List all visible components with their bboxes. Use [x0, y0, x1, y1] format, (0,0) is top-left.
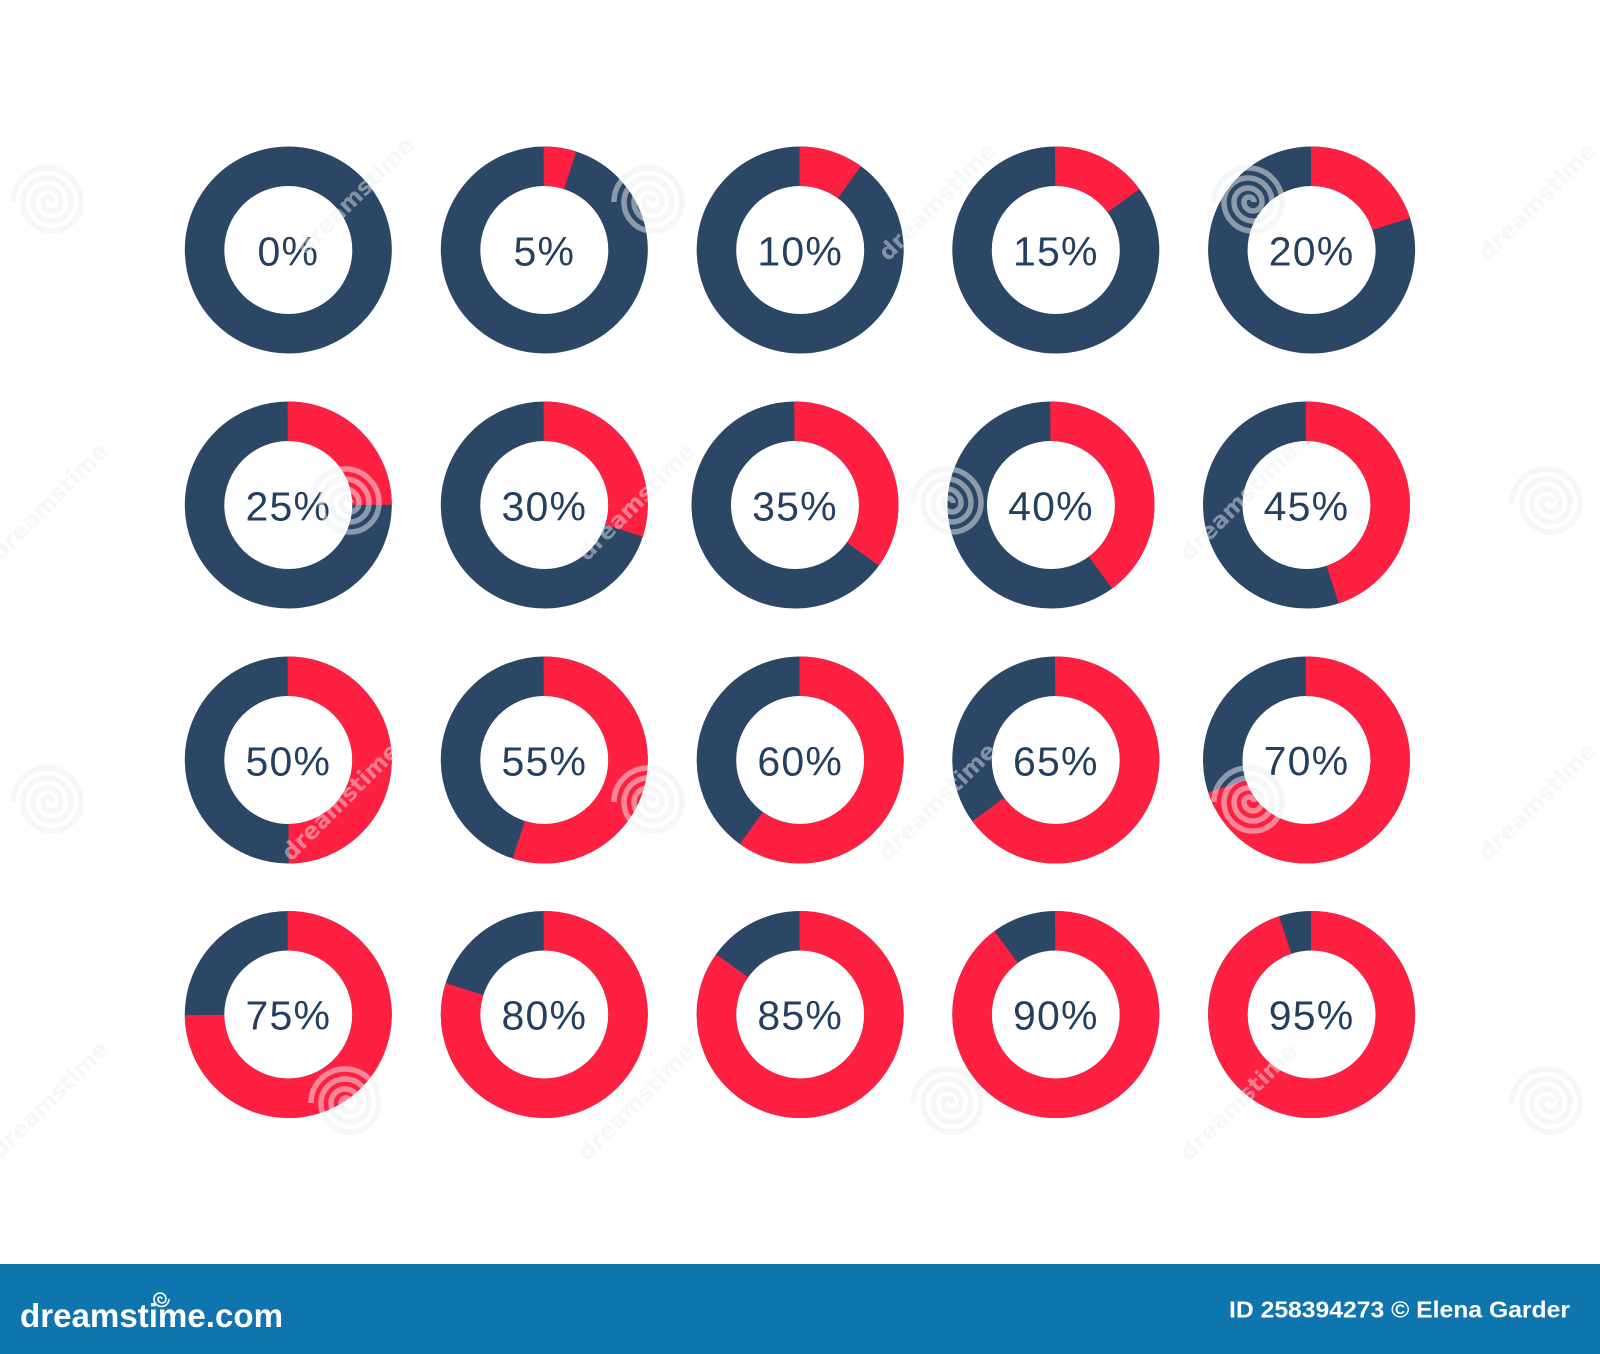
donut: 90%: 90% [1013, 992, 1099, 1038]
donut: 10%: 10% [757, 228, 843, 274]
watermark overlay: dreamstime [874, 138, 1002, 266]
donut: 85% [716, 931, 884, 1098]
donut: 0%: 0% [257, 228, 319, 274]
donut: 80%: 80% [501, 992, 587, 1038]
watermark overlay: dreamstime [292, 132, 420, 260]
donut: 15%: 15% [1013, 228, 1099, 274]
watermark overlay [0, 132, 1600, 1166]
donut: 50%: 50% [245, 738, 331, 784]
donut: 55% [461, 676, 628, 844]
donut: 55%: 55% [501, 738, 587, 784]
donut: 35%: 35% [752, 484, 838, 530]
donut: 45% [1223, 421, 1390, 589]
watermark overlay: dreamstime [277, 738, 405, 866]
donut: 25% [205, 421, 372, 589]
donut: 20% [1228, 166, 1395, 334]
donut: 20%: 20% [1269, 228, 1354, 274]
donut: 45%: 45% [1264, 484, 1349, 530]
donut: 30% [461, 421, 628, 589]
brand logo text: dreamstime.com [20, 1297, 283, 1334]
donut: 35% [711, 421, 879, 589]
donut grid [205, 166, 1395, 1098]
watermark overlay: dreamstime [1474, 738, 1600, 866]
watermark overlay: dreamstime [573, 1038, 701, 1166]
donut: 5% [461, 166, 628, 334]
donut: 80% [461, 931, 628, 1098]
donut: 50% [205, 676, 372, 844]
donut: 30%: 30% [501, 484, 587, 530]
donut: 60%: 60% [757, 738, 843, 784]
donut: 90% [972, 931, 1140, 1098]
watermark overlay: dreamstime [1175, 1038, 1303, 1166]
watermark overlay: dreamstime [874, 738, 1002, 866]
donut: 15% [972, 166, 1140, 334]
donut: 65%: 65% [1013, 738, 1099, 784]
watermark overlay: dreamstime [1474, 138, 1600, 266]
donut: 75%: 75% [245, 992, 331, 1038]
donut: 75% [205, 931, 372, 1098]
donut: 10% [716, 166, 884, 334]
watermark overlay: dreamstime [573, 438, 701, 566]
donut: 70%: 70% [1264, 738, 1349, 784]
donut: 65% [972, 676, 1140, 844]
donut: 40%: 40% [1008, 484, 1094, 530]
footer banner [0, 1264, 1600, 1354]
donut: 25%: 25% [245, 484, 331, 530]
image id and credit: ID 258394273 © Elena Garder [1229, 1296, 1570, 1322]
donut: 40% [967, 421, 1135, 589]
donut: 60% [716, 676, 884, 844]
watermark overlay: dreamstime [1175, 438, 1303, 566]
donut: 85%: 85% [757, 992, 843, 1038]
donut: 5%: 5% [513, 228, 575, 274]
icon: logo spiral [154, 1293, 169, 1306]
donut: 0% [205, 166, 372, 334]
donut: 70% [1223, 676, 1390, 844]
donut: 95%: 95% [1269, 992, 1354, 1038]
donut: 95% [1228, 931, 1395, 1098]
